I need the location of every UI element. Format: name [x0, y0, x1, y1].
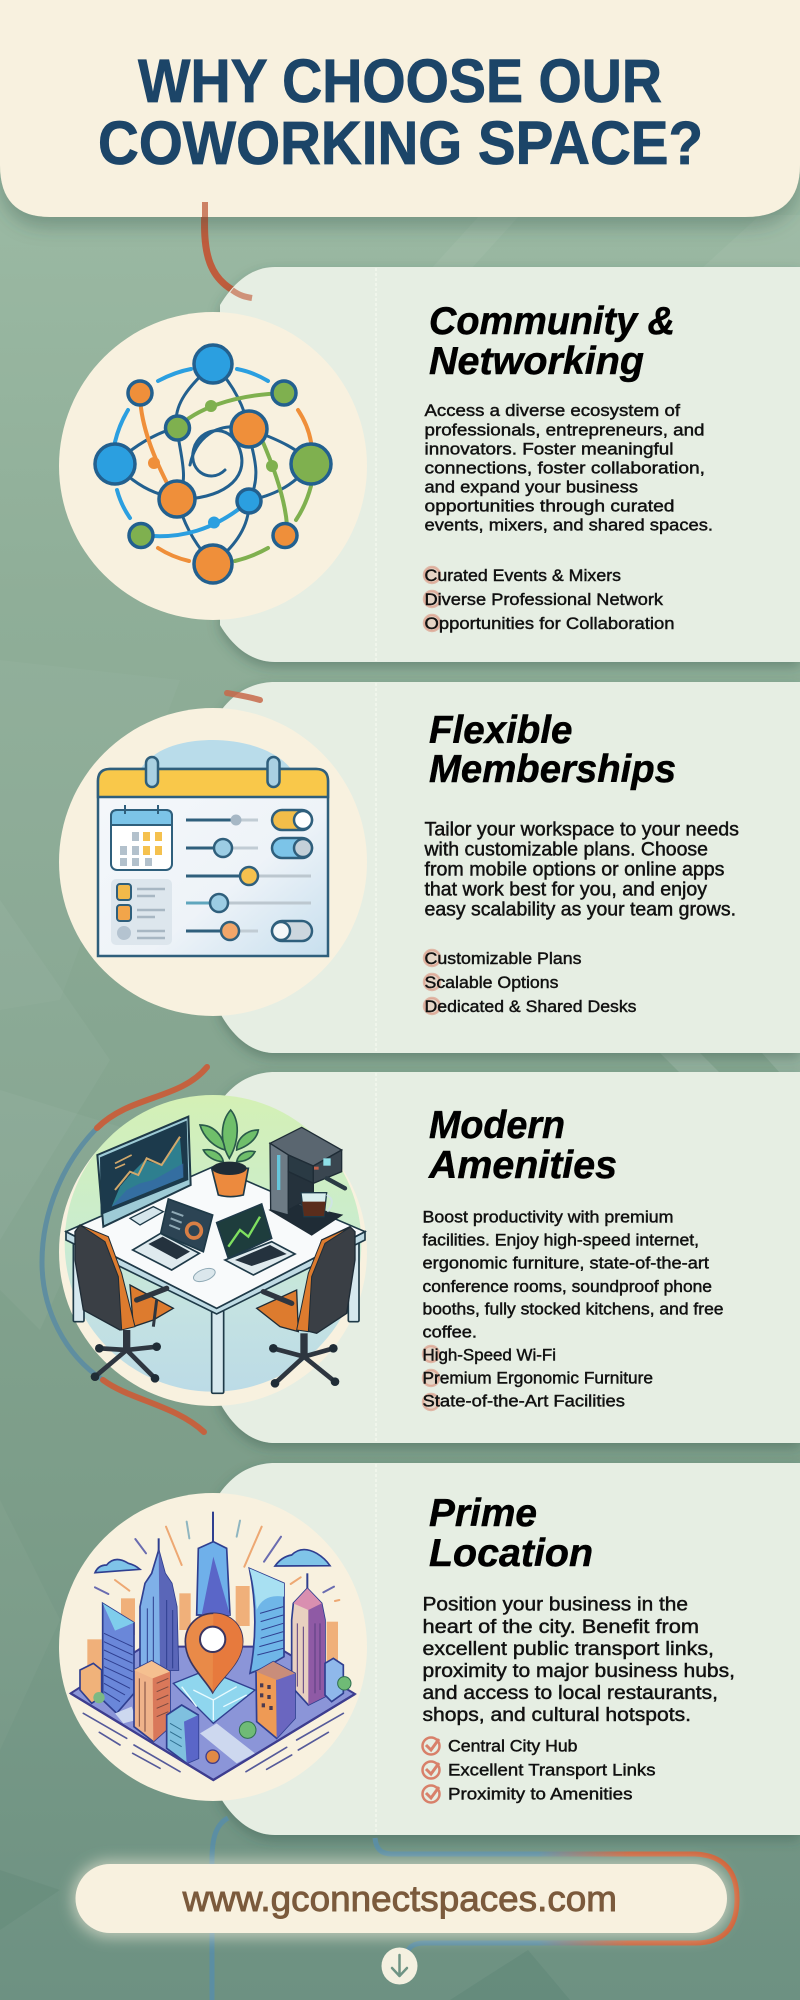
- icon circle: city and location pin: [59, 1493, 367, 1801]
- text block: amenities: coffee.: [422, 1324, 477, 1342]
- text block: flexible: easy scalability as your team grows.: [424, 900, 736, 921]
- spire tower: [304, 1573, 310, 1590]
- feature list: location: [422, 1737, 656, 1804]
- clouds: [95, 1560, 140, 1573]
- feature list: location: Central City Hub: [448, 1737, 578, 1756]
- text block: flexible: [423, 820, 739, 921]
- text block: location: excellent public transport links,: [422, 1639, 714, 1660]
- footer URL pill: [72, 1860, 732, 1938]
- text block: flexible: that work best for you, and enjoy: [424, 880, 708, 901]
- text block: amenities: ergonomic furniture, state-of-the-art: [422, 1255, 709, 1273]
- text block: location: [422, 1595, 735, 1726]
- plant: [200, 1110, 258, 1162]
- blade tower: [103, 1603, 134, 1713]
- heading: flexible: [429, 709, 676, 791]
- text block: community: events, mixers, and shared spaces.: [424, 516, 713, 534]
- text block: flexible: from mobile options or online apps: [424, 860, 724, 881]
- text block: community: innovators. Foster meaningful: [424, 440, 674, 458]
- feature list: flexible: Scalable Options: [424, 973, 558, 992]
- left laptop: [161, 1199, 213, 1252]
- heading: prime location: Location: [429, 1532, 593, 1575]
- heading: flexible: Flexible: [429, 709, 572, 752]
- title: WHY CHOOSE OUR: [138, 47, 662, 115]
- icon: down arrow: [382, 1948, 418, 1984]
- feature list: location: Proximity to Amenities: [448, 1785, 632, 1804]
- rear legs: [73, 1240, 359, 1393]
- small orange block: [80, 1663, 102, 1703]
- text block: flexible: Tailor your workspace to your needs: [424, 820, 739, 841]
- title: [98, 47, 703, 177]
- text block: amenities: [422, 1209, 724, 1342]
- feature list: amenities: [422, 1346, 653, 1411]
- right small block: [325, 1658, 343, 1702]
- right laptop: [217, 1204, 272, 1258]
- arc around desk icon: [42, 1067, 207, 1432]
- panel: community and networking: [59, 267, 800, 662]
- panel: flexible memberships: [59, 682, 800, 1053]
- icon circle: shared desk: [42, 1067, 367, 1432]
- text block: community: connections, foster collaboration,: [424, 458, 705, 478]
- panel: modern amenities: [42, 1067, 800, 1443]
- feature list: location: Excellent Transport Links: [448, 1760, 656, 1780]
- location pin: [185, 1613, 243, 1693]
- text block: community: opportunities through curated: [424, 497, 674, 516]
- website url: www.gconnectspaces.com: [182, 1878, 617, 1919]
- text block: community: Access a diverse ecosystem of: [424, 401, 680, 420]
- feature list: community: Opportunities for Collaboration: [424, 614, 674, 633]
- right chair: [257, 1227, 355, 1388]
- connector end on card: [232, 290, 252, 298]
- icon circle: network: [59, 312, 367, 620]
- text block: location: Position your business in the: [422, 1595, 688, 1616]
- text block: community: and expand your business: [424, 478, 638, 496]
- footer connector lines: [212, 1818, 737, 2000]
- feature list: amenities: State-of-the-Art Facilities: [422, 1392, 625, 1411]
- empire tower: [156, 1538, 162, 1557]
- panel: prime location: [59, 1463, 800, 1835]
- text block: location: shops, and cultural hotspots.: [422, 1705, 691, 1726]
- curved tower: [249, 1568, 284, 1673]
- connector start on header: [202, 202, 208, 217]
- coffee machine: [270, 1127, 342, 1235]
- icon circle: calendar with sliders: [59, 708, 367, 1016]
- left chair: [75, 1225, 173, 1383]
- title: COWORKING SPACE?: [98, 109, 703, 177]
- text block: community: professionals, entrepreneurs, and: [424, 420, 704, 439]
- feature list: community: Diverse Professional Network: [424, 590, 664, 609]
- map plane: [173, 1670, 255, 1723]
- feature list: amenities: Premium Ergonomic Furniture: [422, 1369, 653, 1388]
- text block: community: [424, 401, 713, 534]
- skyline backdrop: [87, 1586, 338, 1669]
- text block: location: heart of the city. Benefit from: [422, 1617, 699, 1638]
- feature list: amenities: High-Speed Wi-Fi: [422, 1346, 556, 1365]
- orange tower: [256, 1662, 295, 1738]
- connector: header to first card: [205, 205, 252, 298]
- heading: prime location: [429, 1492, 593, 1575]
- heading: modern amenities: Modern: [429, 1104, 565, 1147]
- text block: location: and access to local restaurants,: [422, 1683, 718, 1704]
- desk top: [66, 1232, 365, 1314]
- heading: community: [429, 300, 675, 383]
- feature list: flexible: [424, 949, 636, 1016]
- header banner: [0, 0, 800, 217]
- text block: flexible: with customizable plans. Choose: [423, 840, 708, 861]
- heading: community: Community &: [429, 300, 675, 343]
- road: [200, 1723, 255, 1763]
- text block: amenities: conference rooms, soundproof phone: [422, 1278, 712, 1296]
- feature list: community: [424, 566, 674, 633]
- heading: modern amenities: Amenities: [428, 1144, 617, 1187]
- center tower: [210, 1512, 216, 1542]
- connector stub: [227, 693, 260, 700]
- monitor: [130, 1207, 163, 1225]
- text block: amenities: facilities. Enjoy high-speed internet,: [422, 1232, 699, 1250]
- heading: prime location: Prime: [429, 1492, 537, 1535]
- heading: flexible: Memberships: [429, 748, 676, 791]
- tan tower: [134, 1661, 170, 1742]
- ground: [71, 1647, 355, 1780]
- feature list: community: Curated Events & Mixers: [424, 566, 621, 585]
- road marks: [83, 1713, 343, 1772]
- feature list: flexible: Customizable Plans: [424, 949, 582, 968]
- text block: amenities: booths, fully stocked kitchens, and free: [422, 1301, 724, 1319]
- heading: modern amenities: [428, 1104, 617, 1187]
- heading: community: Networking: [429, 340, 644, 383]
- text block: amenities: Boost productivity with premium: [422, 1209, 674, 1227]
- desk scene: [65, 1095, 365, 1393]
- feature list: flexible: Dedicated & Shared Desks: [424, 997, 636, 1016]
- blue block: [167, 1705, 198, 1763]
- text block: location: proximity to major business hubs,: [422, 1661, 735, 1682]
